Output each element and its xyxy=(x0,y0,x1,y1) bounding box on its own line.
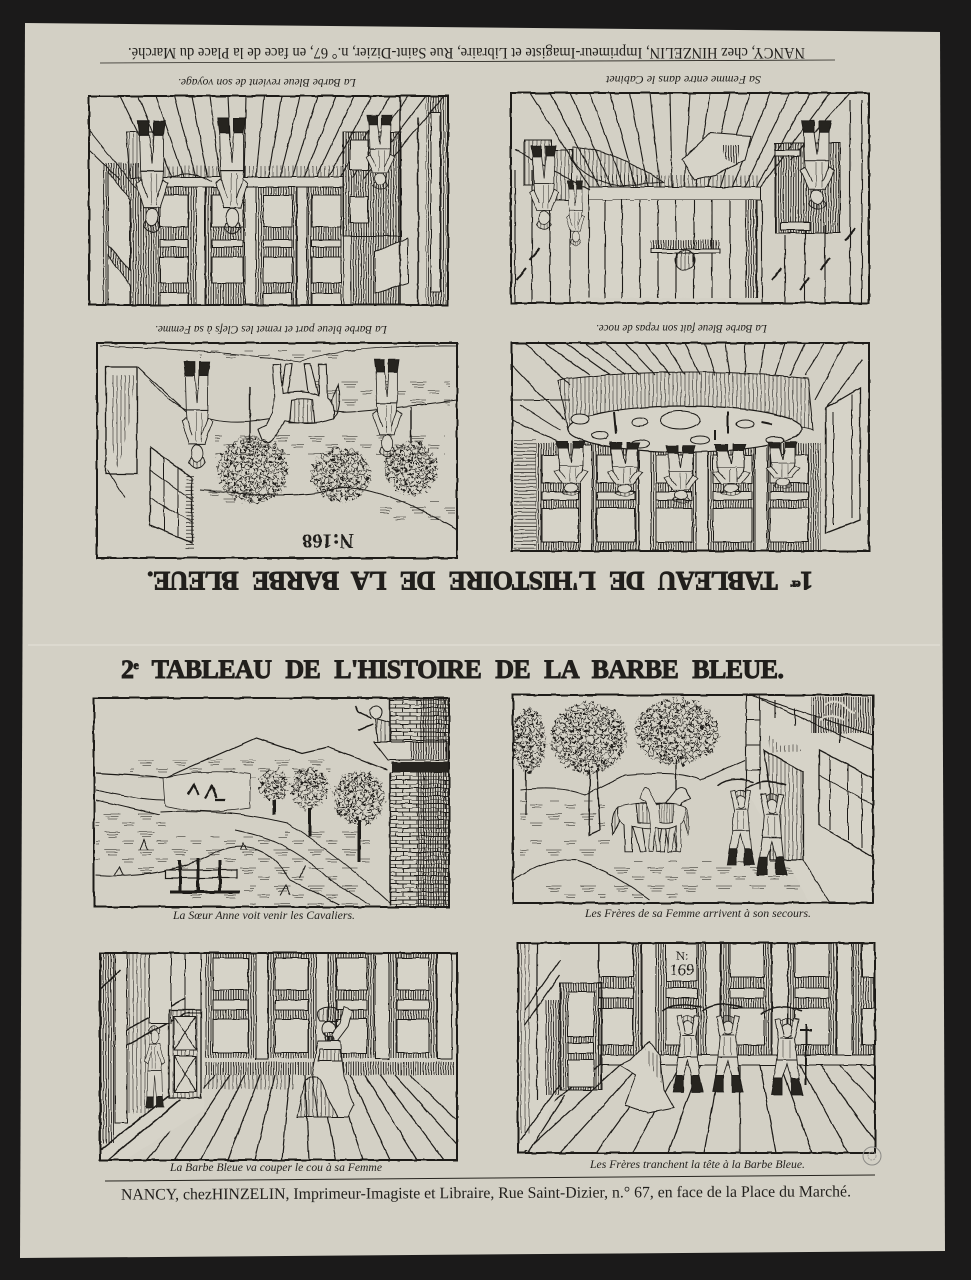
frame A border xyxy=(89,96,448,305)
heading: 2e tableau: TABLEAU DE L'HISTOIRE DE LA BARBE BLEUE. xyxy=(138,655,784,684)
heading: 2e tableau: e xyxy=(133,658,139,672)
woodcut: the brothers arrive xyxy=(512,695,873,903)
caption: La Barbe bleue part et remet les Clefs: La Barbe bleue part et remet les Clefs à sa Femme. xyxy=(155,323,388,335)
heading: 1er tableau, upside down: TABLEAU DE L'HISTOIRE DE LA BARBE BLEUE. xyxy=(147,566,791,595)
caption: La Barbe Bleue va couper le cou: La Barbe Bleue va couper le cou à sa Femme xyxy=(169,1162,382,1174)
woodcut: Barbe Bleue returns (inverted) xyxy=(89,96,448,305)
plate number 169: 169 xyxy=(670,962,694,979)
caption: La Barbe Bleue fait son repas de noce: La Barbe Bleue fait son repas de noce. xyxy=(596,322,768,334)
woodcut: wife enters the cabinet (inverted) xyxy=(511,93,869,303)
frame B border xyxy=(511,93,869,303)
caption: Sa Femme entre dans le Cabinet: Sa Femme entre dans le Cabinet xyxy=(605,73,761,85)
frame H border xyxy=(513,695,873,903)
plate number 168: N:168 xyxy=(302,529,354,553)
frame E border xyxy=(518,943,875,1153)
woodcut: the brothers behead Barbe Bleue xyxy=(516,942,876,1154)
woodcut: Sister Anne on the tower xyxy=(94,695,450,907)
caption: La Barbe Bleue revient de son voyage: La Barbe Bleue revient de son voyage. xyxy=(178,76,357,88)
frame G border xyxy=(94,698,449,907)
fold line xyxy=(28,644,940,646)
heading: 1er tableau, upside down: 1 xyxy=(800,566,813,595)
woodcut: Barbe Bleue departs (inverted) xyxy=(97,343,463,558)
library stamp xyxy=(863,1147,881,1165)
caption: Les Frères de sa Femme: Les Frères de sa Femme arrivent à son secours. xyxy=(584,908,811,920)
caption: La Sœur Anne: La Sœur Anne voit venir les Cavaliers. xyxy=(172,910,355,922)
woodcut: about to cut the wife's neck xyxy=(98,952,458,1162)
heading: 2e tableau: 2 xyxy=(121,655,134,684)
bottom rule xyxy=(105,1175,875,1181)
woodcut: wedding feast (inverted) xyxy=(512,343,869,551)
heading: 1er tableau, upside down: er xyxy=(790,578,801,592)
caption: Les Frères tranchent la tête: Les Frères tranchent la tête à la Barbe Bleue. xyxy=(589,1159,805,1171)
frame D border xyxy=(100,953,457,1160)
bottom imprint line: NANCY, chezHINZELIN, Imprimeur-Imagiste et Libraire, Rue Saint-Dizier, n.° 67, en face de la Place du Marché. xyxy=(121,1183,851,1204)
frame F border xyxy=(512,343,869,551)
plate number 169: N: xyxy=(676,948,688,963)
top imprint line, upside down: NANCY, chez HINZELIN, Imprimeur-Imagiste et Libraire, Rue Saint-Dizier, n.° 67, en face de la Place du Marché. xyxy=(128,44,805,61)
frame C border xyxy=(97,343,457,558)
